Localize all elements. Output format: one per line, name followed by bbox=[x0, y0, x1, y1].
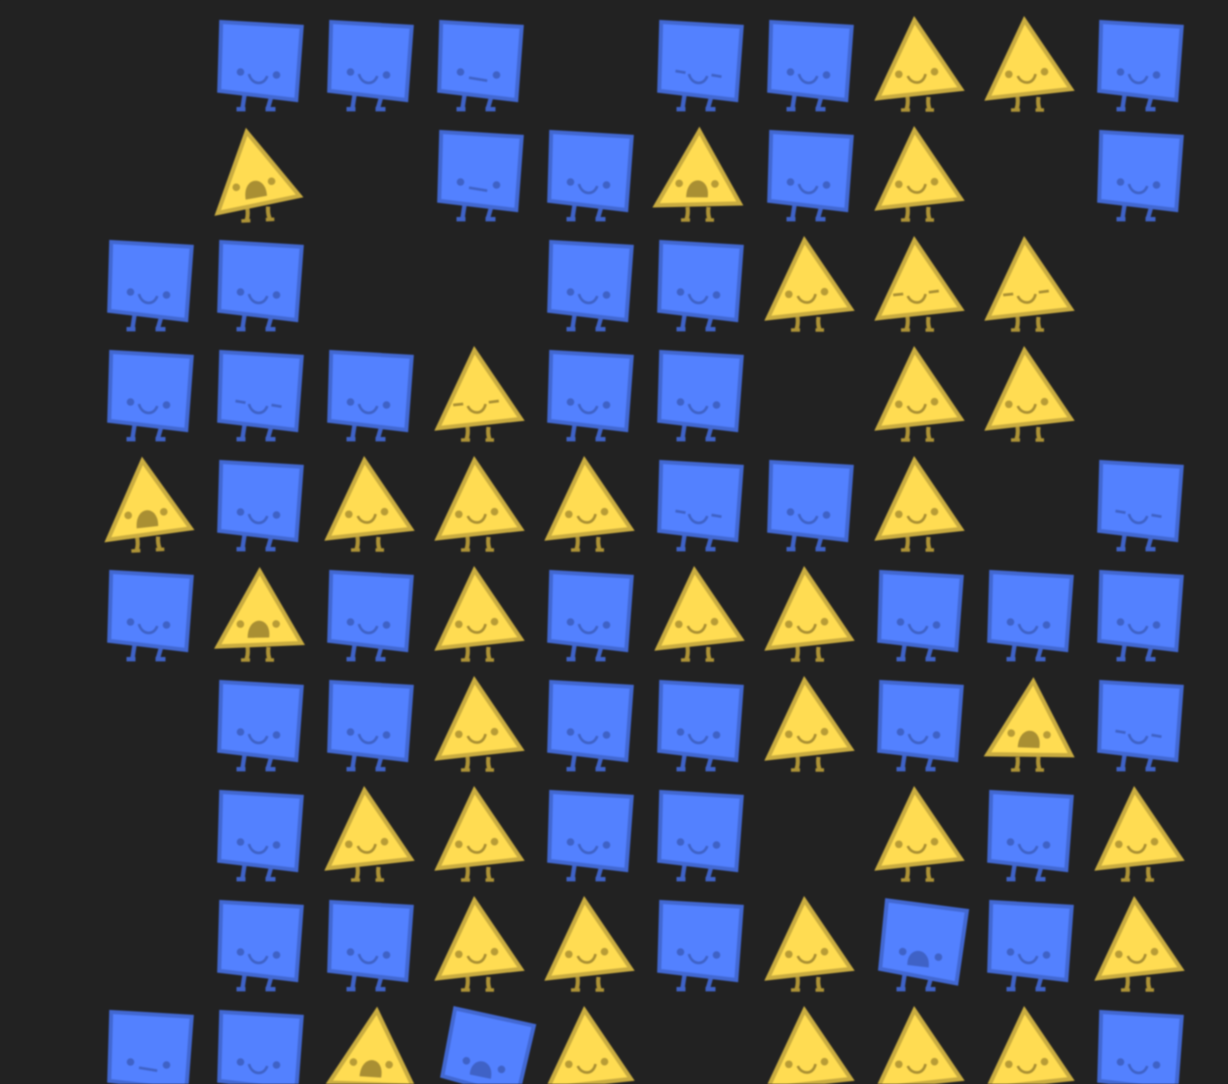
blue square r1 c3 bbox=[329, 22, 412, 109]
blue square r4 c3 bbox=[329, 352, 412, 439]
blue square r2 c5 bbox=[549, 132, 632, 219]
yellow triangle r8 c3 bbox=[328, 790, 411, 880]
yellow triangle r8 c10 bbox=[1098, 790, 1181, 880]
blue square r7 c6 bbox=[659, 682, 742, 769]
yellow triangle scared r5 c1 bbox=[106, 460, 191, 551]
blue square r8 c9 bbox=[989, 792, 1072, 879]
blue square r1 c10 bbox=[1099, 22, 1182, 109]
blue square closed eyes r1 c6 bbox=[659, 22, 742, 109]
yellow triangle r5 c4 bbox=[438, 460, 521, 550]
blue square r7 c3 bbox=[329, 682, 412, 769]
yellow triangle r7 c4 bbox=[438, 680, 521, 770]
blue square r9 c6 bbox=[659, 902, 742, 989]
blue square r7 c2 bbox=[219, 682, 302, 769]
blue square r6 c9 bbox=[989, 572, 1072, 659]
blue square r6 c3 bbox=[329, 572, 412, 659]
blue square r8 c5 bbox=[549, 792, 632, 879]
yellow triangle r4 c9 bbox=[988, 350, 1071, 440]
yellow triangle r1 c9 bbox=[988, 20, 1071, 110]
blue square r7 c8 bbox=[879, 682, 962, 769]
yellow triangle r5 c8 bbox=[878, 460, 961, 550]
blue square neutral r1 c4 bbox=[439, 22, 522, 109]
blue square r1 c2 bbox=[219, 22, 302, 109]
yellow triangle r10 c9 bbox=[988, 1010, 1071, 1084]
yellow triangle r4 c8 bbox=[878, 350, 961, 440]
yellow triangle r10 c7 bbox=[768, 1010, 851, 1084]
yellow triangle scared r2 c6 bbox=[656, 128, 746, 220]
blue square r3 c2 bbox=[219, 242, 302, 329]
blue square r10 c10 bbox=[1099, 1012, 1182, 1084]
yellow triangle r8 c4 bbox=[438, 790, 521, 880]
blue square closed eyes r4 c2 bbox=[219, 352, 302, 439]
yellow triangle r6 c4 bbox=[438, 570, 521, 660]
yellow triangle closed eyes r3 c8 bbox=[878, 240, 961, 330]
yellow triangle r3 c7 bbox=[768, 240, 851, 330]
blue square r3 c1 bbox=[109, 242, 192, 329]
yellow triangle r6 c6 bbox=[658, 570, 741, 660]
yellow triangle r8 c8 bbox=[878, 790, 961, 880]
blue square r5 c7 bbox=[769, 462, 852, 549]
yellow triangle r9 c5 bbox=[548, 900, 631, 990]
blue square neutral r2 c4 bbox=[439, 132, 522, 219]
yellow triangle scared r10 c3 bbox=[329, 1005, 423, 1084]
yellow triangle closed eyes r3 c9 bbox=[988, 240, 1071, 330]
yellow triangle r9 c4 bbox=[438, 900, 521, 990]
blue square r4 c5 bbox=[549, 352, 632, 439]
yellow triangle r5 c3 bbox=[328, 460, 411, 550]
yellow triangle scared r6 c2 bbox=[218, 569, 306, 660]
blue square closed eyes r5 c6 bbox=[659, 462, 742, 549]
yellow triangle closed eyes r4 c4 bbox=[438, 350, 521, 440]
blue square r8 c2 bbox=[219, 792, 302, 879]
blue square r9 c2 bbox=[219, 902, 302, 989]
blue square r7 c5 bbox=[549, 682, 632, 769]
yellow triangle r10 c8 bbox=[878, 1010, 961, 1084]
blue square r6 c1 bbox=[109, 572, 192, 659]
blue square r2 c10 bbox=[1099, 132, 1182, 219]
blue square r1 c7 bbox=[769, 22, 852, 109]
blue square r9 c3 bbox=[329, 902, 412, 989]
blue square neutral r10 c1 bbox=[109, 1012, 192, 1084]
yellow triangle r9 c7 bbox=[768, 900, 851, 990]
blue square r6 c5 bbox=[549, 572, 632, 659]
yellow triangle scared r7 c9 bbox=[987, 677, 1080, 770]
blue square r4 c1 bbox=[109, 352, 192, 439]
yellow triangle r10 c5 bbox=[548, 1010, 631, 1084]
blue square r3 c5 bbox=[549, 242, 632, 329]
blue square r9 c9 bbox=[989, 902, 1072, 989]
blue square r6 c10 bbox=[1099, 572, 1182, 659]
blue square r4 c6 bbox=[659, 352, 742, 439]
yellow triangle r2 c8 bbox=[878, 130, 961, 220]
yellow triangle r6 c7 bbox=[768, 570, 851, 660]
yellow triangle r7 c7 bbox=[768, 680, 851, 770]
blue square r8 c6 bbox=[659, 792, 742, 879]
blue square scared r9 c8 bbox=[880, 900, 967, 989]
yellow triangle scared tilted r2 c2 bbox=[210, 127, 300, 221]
blue square r6 c8 bbox=[879, 572, 962, 659]
blue square r2 c7 bbox=[769, 132, 852, 219]
blue square r10 c2 bbox=[219, 1012, 302, 1084]
blue square r3 c6 bbox=[659, 242, 742, 329]
blue square scared tilted r10 c4 bbox=[441, 1008, 535, 1084]
blue square closed eyes r7 c10 bbox=[1099, 682, 1182, 769]
blue square closed eyes r5 c10 bbox=[1099, 462, 1182, 549]
blue square r5 c2 bbox=[219, 462, 302, 549]
yellow triangle r1 c8 bbox=[878, 20, 961, 110]
yellow triangle r5 c5 bbox=[548, 460, 631, 550]
yellow triangle r9 c10 bbox=[1098, 900, 1181, 990]
